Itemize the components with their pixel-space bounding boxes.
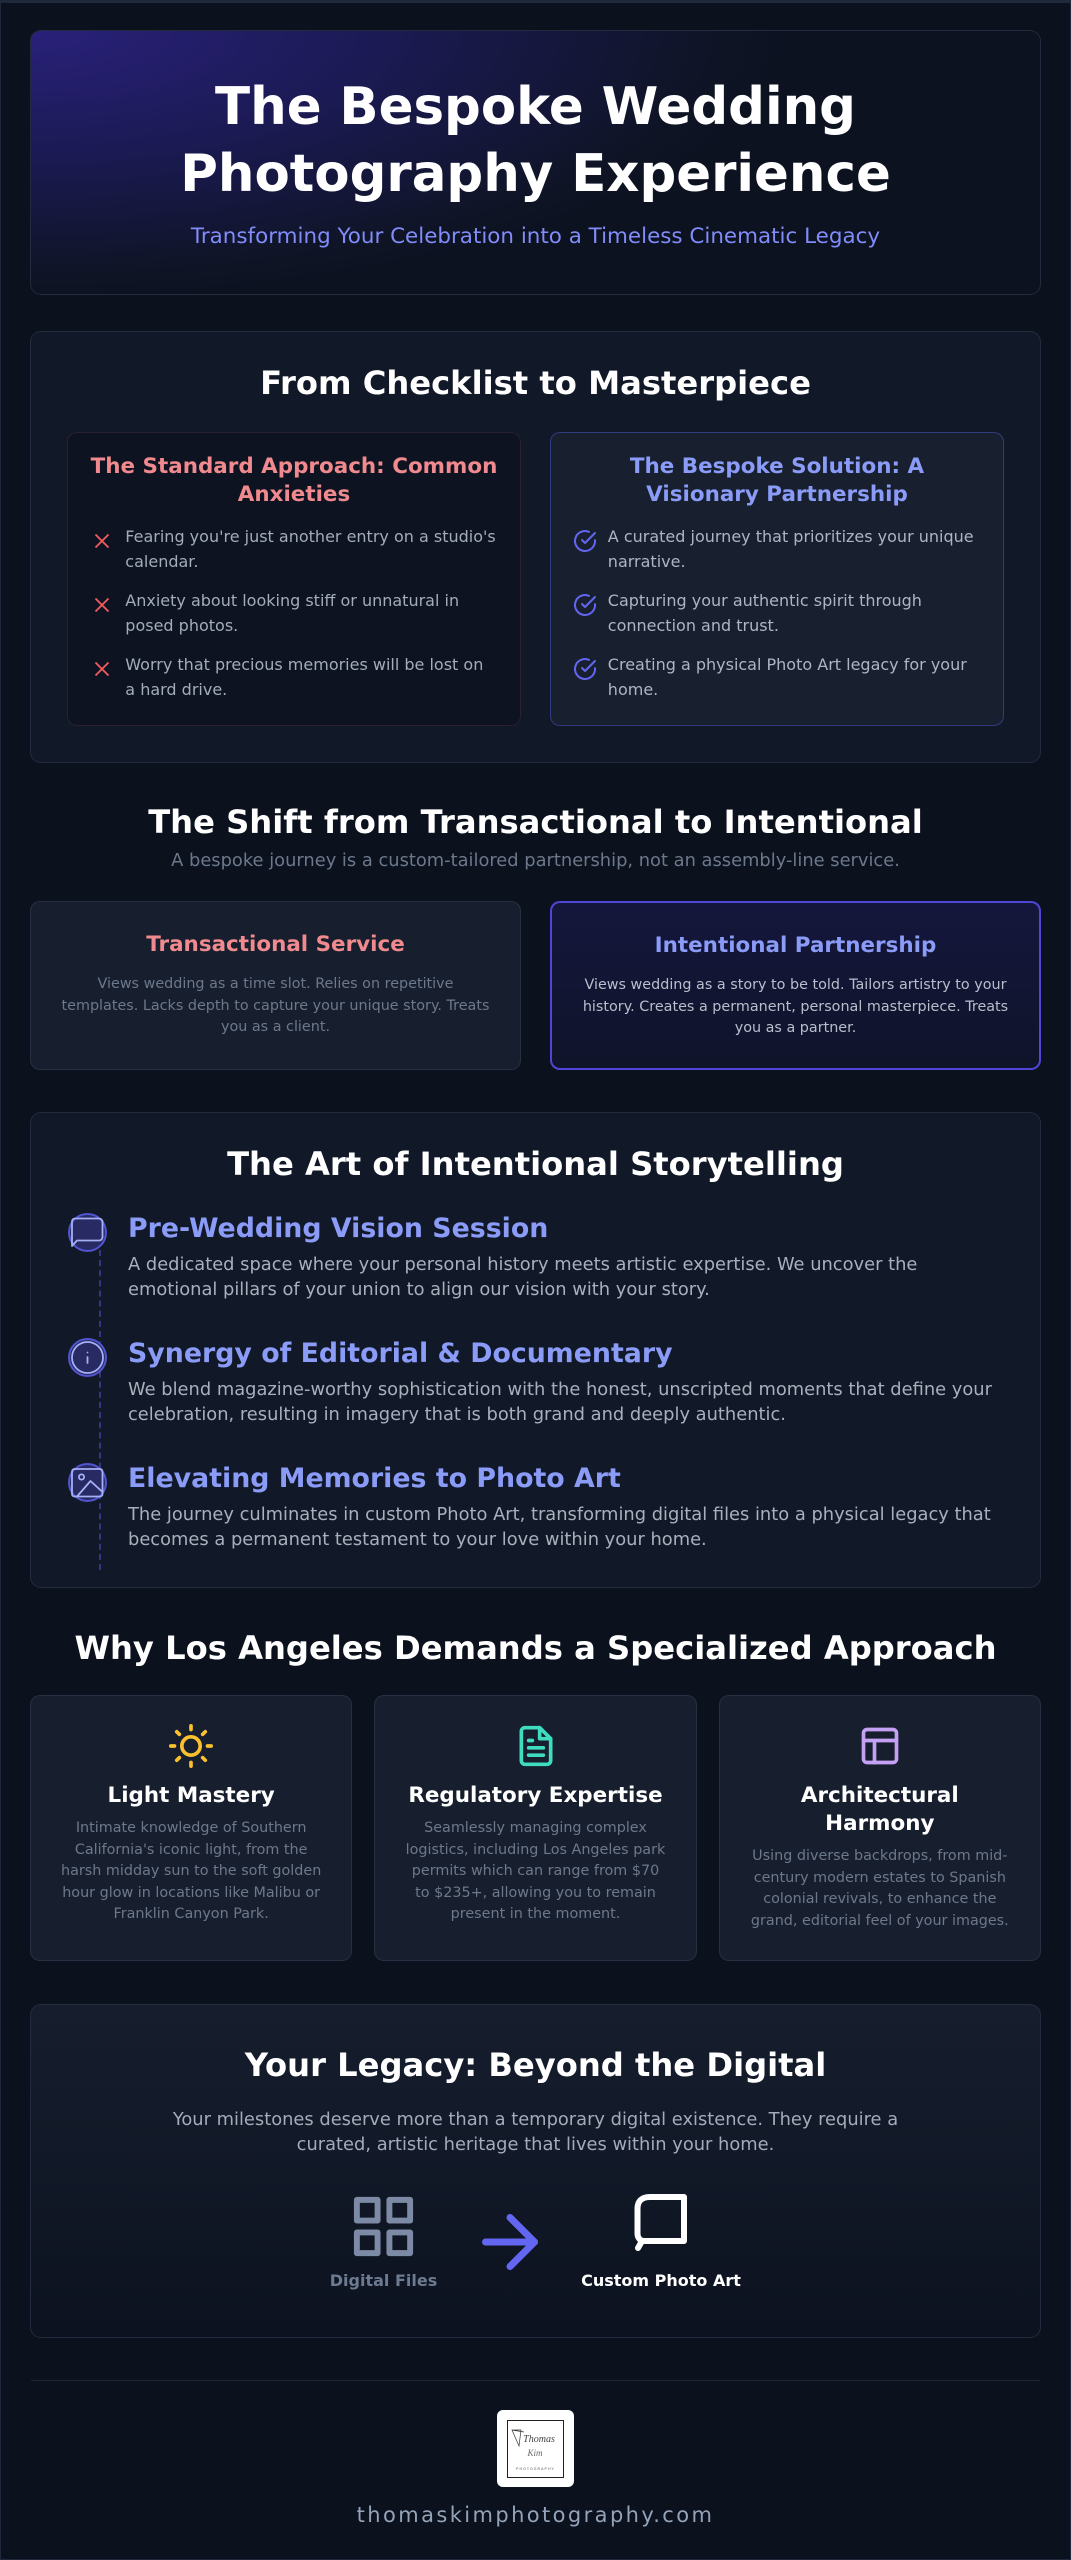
benefit 2: connection and trust.	[608, 616, 779, 634]
step heading: Pre-Wedding Vision Session	[128, 1213, 548, 1244]
card title: Harmony	[825, 1811, 934, 1836]
icon: layout	[862, 1728, 898, 1764]
step text	[128, 1504, 991, 1550]
card text: Views wedding as a story to be told. Tailors artistry to your	[584, 977, 1007, 993]
card text: templates. Lacks depth to capture your unique story. Treats	[62, 998, 489, 1014]
card heading: The Bespoke Solution: A	[630, 454, 924, 479]
logo frame: Kim	[526, 2448, 543, 2458]
x icon 2	[94, 598, 110, 612]
dashed timeline	[99, 1250, 101, 1570]
step text: celebration, resulting in imagery that is both grand and deeply authentic.	[128, 1404, 786, 1425]
card title: Architectural	[801, 1783, 959, 1808]
benefit 2	[608, 590, 922, 634]
card text: colonial revivals, to enhance the	[763, 1891, 996, 1907]
step text: emotional pillars of your union to align our vision with your story.	[128, 1279, 710, 1300]
card text: you as a client.	[221, 1019, 330, 1035]
heading: From Checklist to Masterpiece	[260, 364, 811, 402]
heading: the shift: The Shift from Transactional to Intentional	[148, 802, 923, 840]
card: standard approach	[67, 432, 521, 726]
title: The Bespoke Wedding	[215, 77, 856, 137]
benefit 3	[608, 654, 967, 698]
check icon 1	[574, 530, 596, 552]
panel: your legacy	[30, 2004, 1041, 2338]
logo	[497, 2410, 574, 2487]
subheading: the shift: A bespoke journey is a custom-tailored partnership, not an assembly-line service.	[171, 850, 900, 871]
card text: California's iconic light, from the	[75, 1842, 307, 1858]
paragraph: Your milestones deserve more than a temporary digital existence. They require a	[173, 2109, 898, 2130]
card text: Intimate knowledge of Southern	[76, 1820, 306, 1836]
card heading: Transactional Service	[146, 932, 405, 957]
anxiety 3: a hard drive.	[125, 680, 227, 698]
card title: Light Mastery	[108, 1783, 275, 1808]
icon: digital files grid	[354, 2196, 414, 2256]
footer divider	[31, 2380, 1040, 2381]
paragraph	[172, 2109, 898, 2155]
icon: image	[68, 1463, 107, 1502]
step text: becomes a permanent testament to your love within your home.	[128, 1529, 707, 1550]
card: regulatory expertise	[374, 1695, 697, 1961]
panel: art of intentional storytelling	[30, 1112, 1041, 1588]
card text: harsh midday sun to the soft golden	[61, 1863, 321, 1879]
step 3	[68, 1463, 991, 1550]
label: digital files: Digital Files	[330, 2271, 437, 2290]
icon: photo art frame	[634, 2194, 687, 2251]
heading: The Art of Intentional Storytelling	[227, 1145, 844, 1183]
check icon 3	[574, 658, 596, 680]
step text: The journey culminates in custom Photo Art, transforming digital files into a physical legacy that	[128, 1504, 991, 1524]
website url: thomaskimphotography.com	[357, 2503, 714, 2527]
card: bespoke solution	[550, 432, 1004, 726]
card text	[61, 1820, 321, 1922]
card text: you as a partner.	[735, 1020, 856, 1036]
benefit 1: A curated journey that prioritizes your unique	[608, 526, 974, 546]
logo frame: Thomas	[523, 2434, 555, 2445]
card text	[406, 1820, 666, 1922]
card: intentional partnership	[550, 901, 1041, 1070]
card text: century modern estates to Spanish	[754, 1870, 1006, 1886]
benefit 2: Capturing your authentic spirit through	[608, 590, 922, 610]
label: custom photo art: Custom Photo Art	[581, 2271, 741, 2290]
step text: We blend magazine-worthy sophistication with the honest, unscripted moments that define your	[128, 1378, 992, 1400]
step text: A dedicated space where your personal history meets artistic expertise. We uncover the	[128, 1254, 917, 1274]
anxiety 3: Worry that precious memories will be lost on	[125, 654, 483, 674]
card title	[801, 1783, 959, 1836]
heading: los angeles: Why Los Angeles Demands a Specialized Approach	[74, 1629, 997, 1667]
step text	[128, 1378, 992, 1425]
logo frame: PHOTOGRAPHY	[516, 2467, 555, 2471]
card text: history. Creates a permanent, personal masterpiece. Treats	[583, 998, 1008, 1014]
icon: document	[520, 1726, 552, 1766]
benefit 1: narrative.	[608, 552, 686, 570]
step heading: Synergy of Editorial & Documentary	[128, 1338, 673, 1369]
card heading: The Standard Approach: Common	[91, 454, 497, 479]
card text: permits which can range from $70	[412, 1863, 659, 1879]
card title: Regulatory Expertise	[408, 1783, 663, 1808]
step 2	[68, 1338, 992, 1425]
icon: sun	[169, 1724, 213, 1768]
card: transactional service	[30, 901, 521, 1070]
logo frame	[507, 2420, 564, 2478]
card text: grand, editorial feel of your images.	[751, 1912, 1009, 1928]
x icon 1	[94, 534, 110, 548]
check icon 2	[574, 594, 596, 616]
card text	[751, 1848, 1009, 1928]
card text: present in the moment.	[451, 1906, 620, 1922]
title	[180, 77, 891, 204]
anxiety 1: calendar.	[125, 552, 198, 570]
card text: Seamlessly managing complex	[424, 1820, 647, 1836]
card heading: Anxieties	[238, 482, 350, 507]
anxiety 1	[125, 526, 496, 570]
card text	[62, 976, 489, 1035]
card text: Franklin Canyon Park.	[114, 1906, 269, 1922]
panel: from checklist to masterpiece	[30, 331, 1041, 763]
step text	[128, 1254, 917, 1300]
step 1	[68, 1213, 917, 1300]
card text: Views wedding as a time slot. Relies on repetitive	[98, 976, 453, 992]
card text	[583, 977, 1008, 1036]
step heading: Elevating Memories to Photo Art	[128, 1463, 621, 1494]
card: architectural harmony	[719, 1695, 1041, 1961]
icon: chat	[68, 1213, 107, 1252]
subtitle: Transforming Your Celebration into a Timeless Cinematic Legacy	[191, 224, 880, 249]
card heading	[630, 454, 924, 507]
card: light mastery	[30, 1695, 352, 1961]
anxiety 3	[125, 654, 483, 698]
card text: hour glow in locations like Malibu or	[62, 1884, 320, 1900]
card heading	[90, 454, 497, 507]
anxiety 1: Fearing you're just another entry on a studio's	[125, 526, 496, 546]
benefit 1	[608, 526, 974, 570]
hero panel	[30, 30, 1041, 295]
card text: to $235+, allowing you to remain	[415, 1884, 656, 1900]
card text: Using diverse backdrops, from mid-	[752, 1848, 1007, 1864]
heading: Your Legacy: Beyond the Digital	[245, 2046, 826, 2084]
card heading: Intentional Partnership	[655, 933, 936, 958]
benefit 3: home.	[608, 680, 658, 698]
paragraph: curated, artistic heritage that lives within your home.	[297, 2134, 774, 2155]
card text: logistics, including Los Angeles park	[406, 1842, 665, 1858]
title: Photography Experience	[180, 144, 891, 204]
anxiety 2: Anxiety about looking stiff or unnatural in	[125, 590, 459, 610]
anxiety 2: posed photos.	[125, 616, 238, 634]
anxiety 2	[125, 590, 459, 634]
icon: arrow	[482, 2214, 538, 2270]
icon: info	[68, 1338, 107, 1377]
x icon 3	[94, 662, 110, 676]
card heading: Visionary Partnership	[646, 482, 908, 507]
benefit 3: Creating a physical Photo Art legacy for your	[608, 654, 967, 674]
